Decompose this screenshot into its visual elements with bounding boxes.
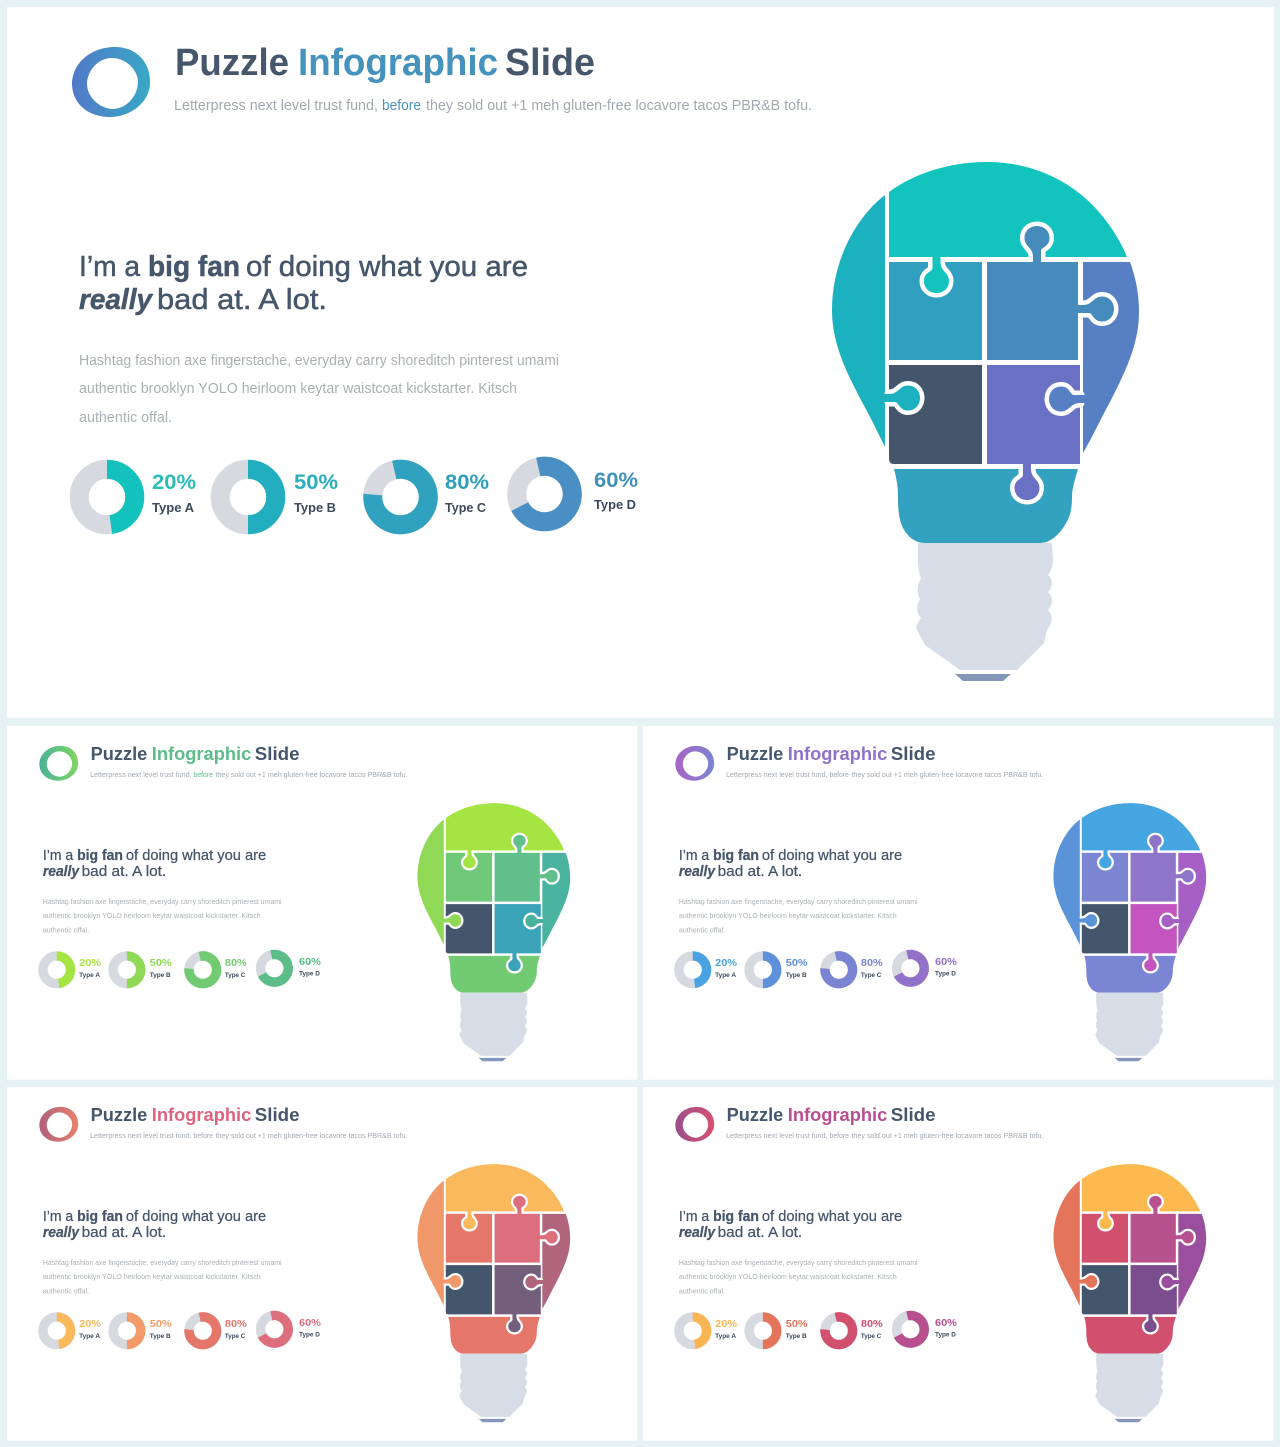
puzzle tab: right into cell 4 xyxy=(1049,386,1087,412)
subtitle: before xyxy=(194,770,213,779)
heading: I’m a xyxy=(43,1209,74,1225)
donut labels: Type D xyxy=(299,1332,320,1339)
donut labels: 80% xyxy=(861,958,883,969)
donut labels xyxy=(715,957,957,979)
slide background xyxy=(643,726,1273,1080)
donut labels: 20% xyxy=(79,958,101,969)
heading: bad at. A lot. xyxy=(157,284,327,316)
donut charts xyxy=(43,1313,291,1347)
donut labels xyxy=(79,1318,321,1340)
heading: I’m a xyxy=(679,848,710,864)
light bulb puzzle xyxy=(1053,803,1206,1061)
donut labels: Type C xyxy=(861,1333,882,1340)
donut labels: 50% xyxy=(786,958,808,969)
heading: I’m a xyxy=(679,1209,710,1225)
heading: bad at. A lot. xyxy=(82,1225,166,1241)
title xyxy=(91,1105,300,1126)
heading xyxy=(679,848,902,880)
subtitle: before xyxy=(194,1131,213,1140)
donut labels: 50% xyxy=(294,471,338,494)
donut charts xyxy=(43,952,291,986)
donut labels xyxy=(79,957,321,979)
donut labels: Type A xyxy=(79,1333,100,1340)
donut labels: Type B xyxy=(150,1333,171,1340)
text block: Hashtag fashion axe fingerstache, everyday carry shoreditch pinterest umami xyxy=(679,1258,918,1267)
donut labels: Type A xyxy=(715,1333,736,1340)
donut: Type C 80% xyxy=(367,464,434,530)
text block: authentic offal. xyxy=(43,1286,89,1295)
title: Slide xyxy=(891,744,936,765)
text block: authentic brooklyn YOLO heirloom keytar waistcoat kickstarter. Kitsch xyxy=(679,911,897,920)
heading: of doing what you are xyxy=(126,1209,266,1225)
donut labels: 80% xyxy=(225,958,247,969)
heading: big fan xyxy=(77,1209,123,1225)
panel: pink slide xyxy=(643,1087,1273,1441)
text block xyxy=(43,1258,282,1295)
subtitle: before xyxy=(830,1131,849,1140)
title xyxy=(91,744,300,765)
donut labels: Type B xyxy=(294,500,336,515)
title: Puzzle xyxy=(91,1105,147,1126)
text block xyxy=(79,352,559,426)
donut labels: 60% xyxy=(299,1318,321,1329)
heading xyxy=(79,251,528,316)
title: Slide xyxy=(891,1105,936,1126)
donut labels xyxy=(152,469,638,515)
subtitle: Letterpress next level trust fund, xyxy=(726,770,828,779)
puzzle tab: top into cell 1 xyxy=(924,255,949,293)
left piece xyxy=(832,195,885,447)
donut labels: Type C xyxy=(225,972,246,979)
donut labels: Type B xyxy=(786,1333,807,1340)
subtitle: they sold out +1 meh gluten-free locavore tacos PBR&B tofu. xyxy=(426,97,812,114)
puzzle tab: cell 4 into bottom xyxy=(1014,462,1040,500)
text block: authentic brooklyn YOLO heirloom keytar waistcoat kickstarter. Kitsch xyxy=(79,380,517,397)
title xyxy=(727,744,936,765)
heading: I’m a xyxy=(43,848,74,864)
donut labels: Type C xyxy=(445,500,487,515)
title: Infographic xyxy=(788,1105,887,1126)
subtitle: before xyxy=(382,97,421,114)
heading: of doing what you are xyxy=(246,251,528,283)
slide background xyxy=(7,7,1274,718)
panel: orange slide xyxy=(7,1087,637,1441)
heading: of doing what you are xyxy=(762,848,902,864)
donut labels: 80% xyxy=(445,471,489,494)
donut labels: Type C xyxy=(225,1333,246,1340)
donut labels: Type A xyxy=(152,500,195,515)
icon: logo ring xyxy=(675,746,714,781)
heading: bad at. A lot. xyxy=(718,1225,802,1241)
text block: authentic offal. xyxy=(43,925,89,934)
heading: really xyxy=(679,1225,716,1241)
subtitle: Letterpress next level trust fund, xyxy=(174,97,378,114)
donut: Type B 50% xyxy=(220,469,276,525)
title: Infographic xyxy=(788,744,887,765)
title: Slide xyxy=(255,744,300,765)
light bulb puzzle xyxy=(417,1164,570,1422)
subtitle: they sold out +1 meh gluten-free locavore tacos PBR&B tofu. xyxy=(851,770,1043,779)
title: Puzzle xyxy=(91,744,147,765)
donut labels xyxy=(715,1318,957,1340)
subtitle: before xyxy=(830,770,849,779)
heading: of doing what you are xyxy=(126,848,266,864)
heading xyxy=(43,1209,266,1241)
heading: bad at. A lot. xyxy=(82,864,166,880)
text block xyxy=(43,897,282,934)
heading: really xyxy=(43,1225,80,1241)
panel: main blue slide xyxy=(7,7,1274,718)
heading: really xyxy=(43,864,80,880)
light bulb puzzle xyxy=(1053,1164,1206,1422)
donut labels: Type D xyxy=(594,497,636,512)
donut labels: 50% xyxy=(150,958,172,969)
donut labels: Type B xyxy=(150,972,171,979)
panel: purple slide xyxy=(643,726,1273,1080)
donut labels: 50% xyxy=(150,1319,172,1330)
subtitle: they sold out +1 meh gluten-free locavore tacos PBR&B tofu. xyxy=(851,1131,1043,1140)
heading xyxy=(43,848,266,880)
heading: big fan xyxy=(713,848,759,864)
slide background xyxy=(7,726,637,1080)
heading: big fan xyxy=(713,1209,759,1225)
title xyxy=(175,42,595,84)
donut labels: 60% xyxy=(299,957,321,968)
subtitle: Letterpress next level trust fund, xyxy=(726,1131,828,1140)
text block xyxy=(679,897,918,934)
subtitle: Letterpress next level trust fund, xyxy=(90,770,192,779)
donut labels: 50% xyxy=(786,1319,808,1330)
slide background xyxy=(7,1087,637,1441)
donut labels: Type D xyxy=(935,1332,956,1339)
right piece xyxy=(1083,262,1139,453)
puzzle tab: cell 2 into top xyxy=(1024,226,1050,264)
puzzle cell 4 xyxy=(987,365,1080,464)
donut labels: Type A xyxy=(79,972,100,979)
bulb base xyxy=(916,543,1053,670)
text block: Hashtag fashion axe fingerstache, everyday carry shoreditch pinterest umami xyxy=(43,897,282,906)
icon: logo ring xyxy=(39,1107,78,1142)
donut labels: Type B xyxy=(786,972,807,979)
subtitle: they sold out +1 meh gluten-free locavore tacos PBR&B tofu. xyxy=(215,1131,407,1140)
heading: I’m a xyxy=(79,251,141,283)
subtitle xyxy=(726,1131,1043,1140)
subtitle xyxy=(726,770,1043,779)
title: Puzzle xyxy=(175,42,289,84)
donut labels: 60% xyxy=(935,957,957,968)
heading xyxy=(679,1209,902,1241)
icon: logo ring xyxy=(675,1107,714,1142)
text block: authentic offal. xyxy=(79,409,172,426)
heading: really xyxy=(79,284,154,316)
title: Puzzle xyxy=(727,744,783,765)
donut labels: Type D xyxy=(935,971,956,978)
text block: authentic brooklyn YOLO heirloom keytar waistcoat kickstarter. Kitsch xyxy=(43,911,261,920)
heading: really xyxy=(679,864,716,880)
donut labels: 20% xyxy=(79,1319,101,1330)
icon: logo ring xyxy=(39,746,78,781)
slide background xyxy=(643,1087,1273,1441)
donut labels: 60% xyxy=(594,469,638,492)
subtitle: Letterpress next level trust fund, xyxy=(90,1131,192,1140)
text block: Hashtag fashion axe fingerstache, everyday carry shoreditch pinterest umami xyxy=(79,352,559,369)
puzzle tab: cell 2 into right xyxy=(1076,296,1114,322)
light bulb puzzle xyxy=(417,803,570,1061)
text block: authentic offal. xyxy=(679,1286,725,1295)
title: Infographic xyxy=(152,744,251,765)
light bulb puzzle xyxy=(832,162,1139,681)
title: Infographic xyxy=(152,1105,251,1126)
heading: big fan xyxy=(148,251,240,283)
heading: of doing what you are xyxy=(762,1209,902,1225)
donut charts xyxy=(79,461,578,530)
donut: Type A 20% xyxy=(79,469,135,525)
subtitle xyxy=(90,1131,407,1140)
donut labels: 20% xyxy=(715,1319,737,1330)
puzzle cell 2 xyxy=(987,262,1078,360)
text block: Hashtag fashion axe fingerstache, everyday carry shoreditch pinterest umami xyxy=(43,1258,282,1267)
subtitle: they sold out +1 meh gluten-free locavore tacos PBR&B tofu. xyxy=(215,770,407,779)
donut labels: Type D xyxy=(299,971,320,978)
donut labels: 60% xyxy=(935,1318,957,1329)
heading: bad at. A lot. xyxy=(718,864,802,880)
icon: logo ring xyxy=(72,47,150,117)
donut: Type D 60% xyxy=(511,461,578,527)
title: Puzzle xyxy=(727,1105,783,1126)
title xyxy=(727,1105,936,1126)
text block xyxy=(679,1258,918,1295)
panel: green slide xyxy=(7,726,637,1080)
puzzle tab: left into cell 3 xyxy=(882,386,920,410)
donut labels: 20% xyxy=(715,958,737,969)
puzzle cell 1 xyxy=(889,262,982,360)
top piece xyxy=(889,162,1127,257)
subtitle xyxy=(90,770,407,779)
donut charts xyxy=(679,952,927,986)
text block: authentic brooklyn YOLO heirloom keytar waistcoat kickstarter. Kitsch xyxy=(43,1272,261,1281)
donut labels: 20% xyxy=(152,471,196,494)
subtitle xyxy=(174,97,812,114)
heading: big fan xyxy=(77,848,123,864)
donut charts xyxy=(679,1313,927,1347)
text block: authentic offal. xyxy=(679,925,725,934)
title: Slide xyxy=(255,1105,300,1126)
text block: authentic brooklyn YOLO heirloom keytar waistcoat kickstarter. Kitsch xyxy=(679,1272,897,1281)
donut labels: 80% xyxy=(861,1319,883,1330)
bulb tip xyxy=(955,674,1011,681)
puzzle cell 3 xyxy=(889,365,982,464)
text block: Hashtag fashion axe fingerstache, everyday carry shoreditch pinterest umami xyxy=(679,897,918,906)
title: Slide xyxy=(505,42,595,84)
donut labels: 80% xyxy=(225,1319,247,1330)
donut labels: Type C xyxy=(861,972,882,979)
title: Infographic xyxy=(298,42,498,84)
bottom piece xyxy=(894,469,1078,543)
donut labels: Type A xyxy=(715,972,736,979)
